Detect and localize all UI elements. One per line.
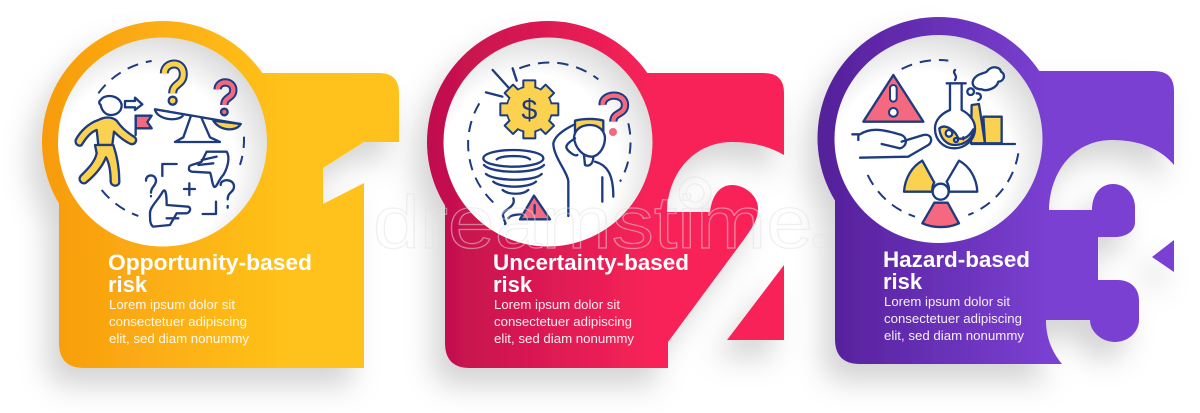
body text 3: consectetuer adipiscing — [884, 311, 1022, 326]
body text 1: Lorem ipsum dolor sit — [109, 297, 235, 312]
body text 2: Lorem ipsum dolor sit — [494, 297, 620, 312]
heading 2: Uncertainty-based — [493, 250, 689, 275]
panel 1: opportunity-based risk — [42, 21, 399, 368]
panel 3: hazard-based risk — [818, 17, 1174, 364]
icon: gear, tornado, warning and confused man — [468, 63, 631, 224]
white icon circle 2 — [444, 38, 652, 246]
icon: warning, hand, flask, factory and radiation — [852, 60, 1018, 227]
body text 2: consectetuer adipiscing — [494, 314, 632, 329]
heading 3: Hazard-based — [883, 247, 1030, 272]
body text 1: consectetuer adipiscing — [109, 314, 247, 329]
yellow card with numeral 1 cut out — [42, 21, 399, 368]
body text 3: elit, sed diam nonummy — [884, 328, 1025, 343]
heading 3: risk — [883, 269, 923, 294]
icon: gear, tornado, warning and confused man: $ — [521, 94, 537, 126]
heading 2: risk — [493, 272, 533, 297]
body text 1: elit, sed diam nonummy — [109, 331, 250, 346]
body text 2: elit, sed diam nonummy — [494, 331, 635, 346]
watermark: dreamstime — [373, 181, 813, 264]
white icon circle 3 — [834, 35, 1042, 243]
icon: person, scales, hands and question marks — [76, 61, 244, 227]
heading 1: risk — [108, 272, 148, 297]
panel 2: uncertainty-based risk — [427, 21, 784, 368]
white icon circle 1 — [58, 38, 267, 246]
body text 3: Lorem ipsum dolor sit — [884, 294, 1010, 309]
red card with numeral 2 cut out — [427, 21, 784, 368]
purple card with numeral 3 cut out — [818, 17, 1174, 364]
heading 1: Opportunity-based — [108, 250, 312, 275]
